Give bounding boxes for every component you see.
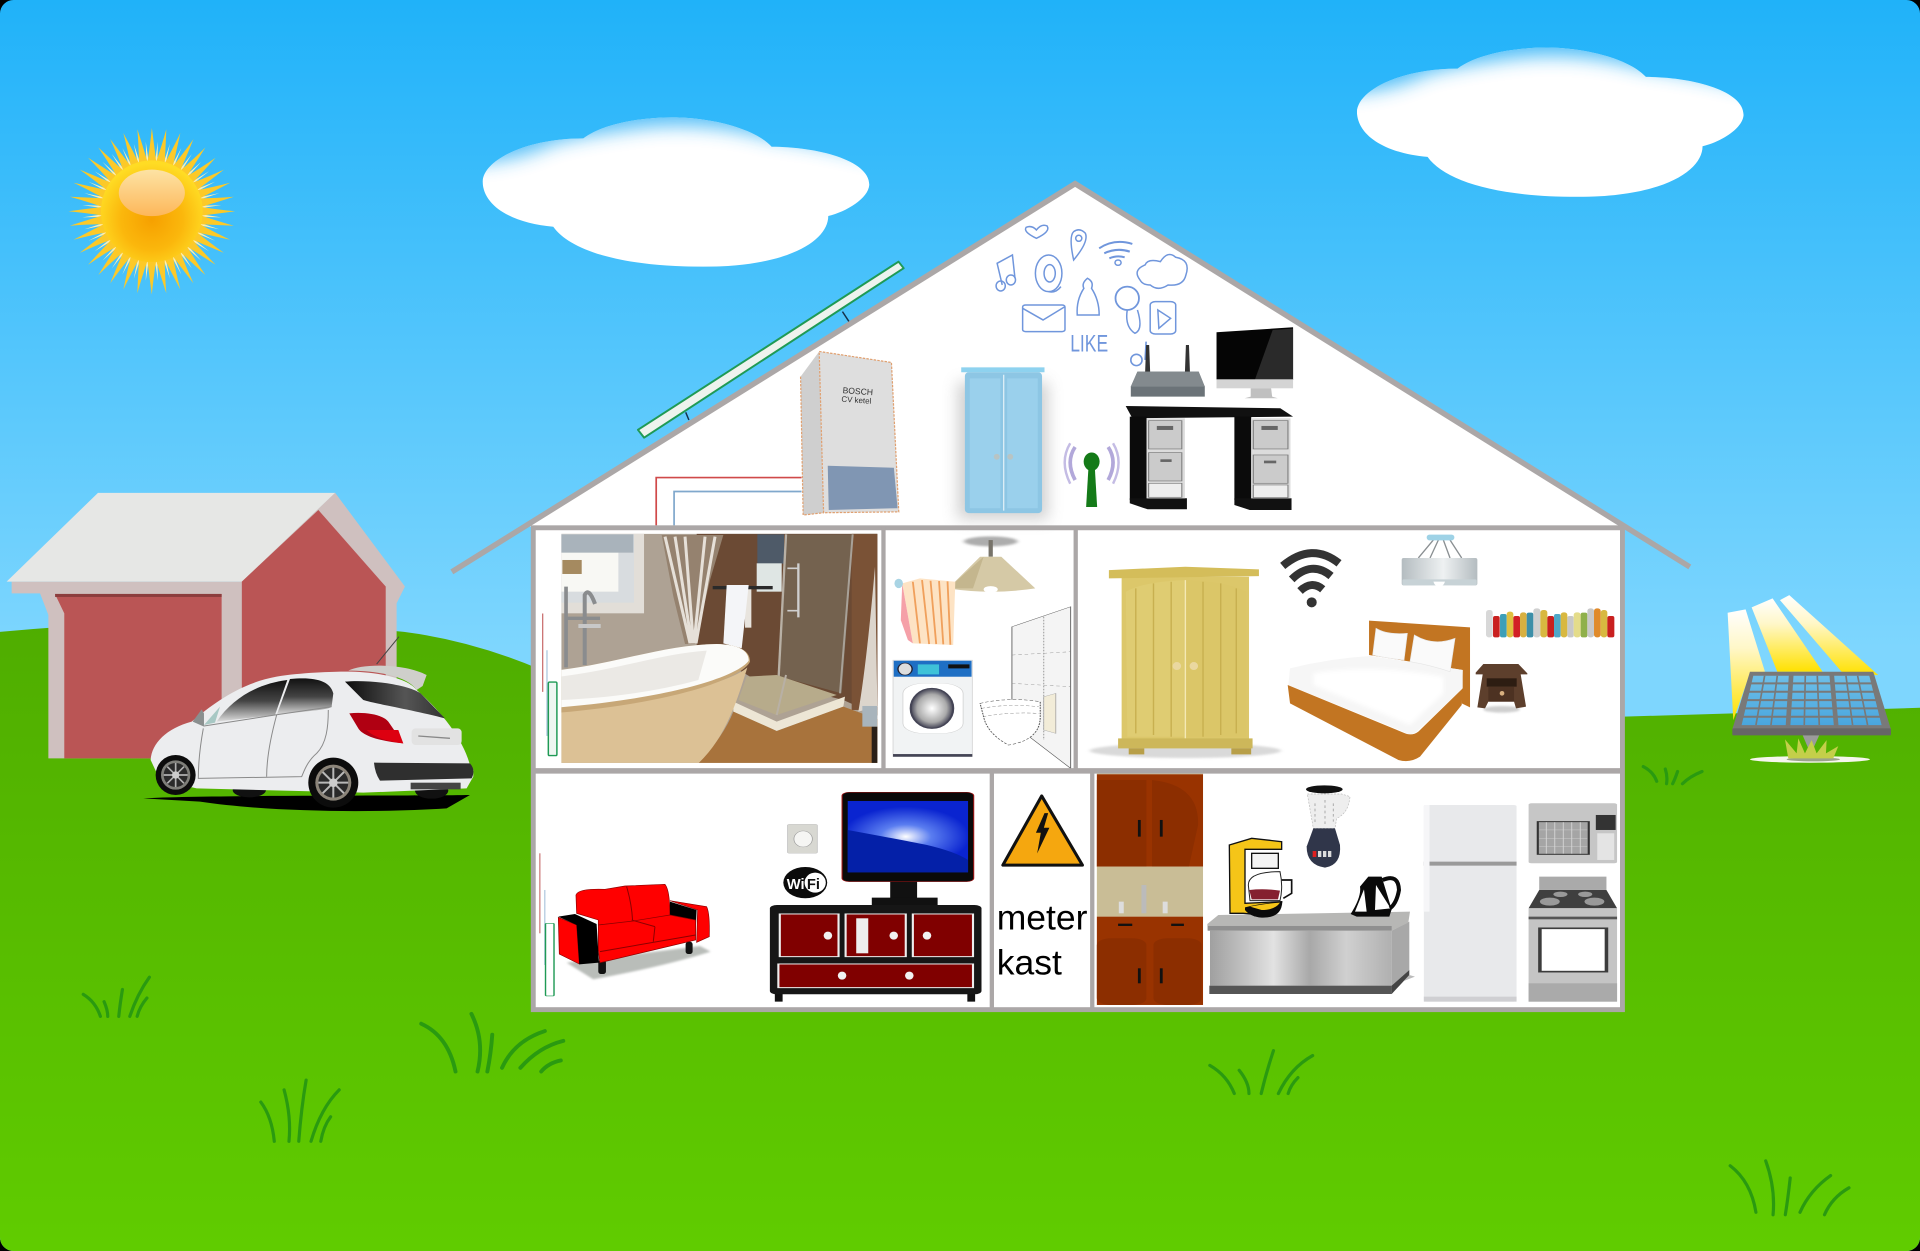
warning sign [1003,796,1082,865]
kettle [1351,877,1399,917]
bathroom wood wall [697,533,880,717]
bookshelf [1486,608,1614,637]
bathroom window [560,533,644,613]
curtain right [858,567,877,712]
bathtub [560,644,750,763]
wifi logo text: Wi [787,877,805,893]
blender [1306,785,1350,868]
house [452,184,1690,1011]
refrigerator [1424,805,1517,1002]
stove [1529,877,1617,1002]
bathroom wall [560,533,880,767]
coffee maker [1229,838,1292,918]
wifi logo text [787,877,820,893]
barn roof [7,493,335,582]
wifi signal icon [1283,553,1339,607]
nightstand [1476,664,1527,713]
meter cupboard label: kast [997,943,1062,983]
toilet [980,693,1056,745]
attic fill [525,184,1625,527]
grass tuft 1 [83,977,149,1016]
solar collector on roof [638,262,904,438]
grass tuft 5 [1730,1161,1849,1215]
boiler [801,351,899,515]
cloud right [1357,48,1744,197]
monitor [1217,327,1293,398]
desk [1126,406,1293,510]
grass tuft 4 [1210,1051,1313,1094]
tiled wall [1012,607,1071,768]
car [143,637,473,811]
ground hills [0,622,1920,1251]
pendant lamp [1402,535,1477,587]
barn side trim [241,493,405,698]
grass tuft 2 [421,1014,563,1071]
bed [1288,621,1470,761]
pipes and radiator bathroom [543,613,557,756]
doodle icons [996,225,1187,366]
doodle word: LIKE [1070,330,1108,357]
shower base [733,675,845,731]
wood panel right [852,533,878,710]
television [842,792,974,907]
sun beams [1728,595,1878,720]
barn door [55,594,222,758]
sun [69,128,235,295]
rooms fill [531,527,1624,1011]
router [1131,345,1205,397]
panel: bedroom wardrobe [1090,567,1281,758]
grass tuft 3 [261,1080,339,1141]
wifi logo background [783,867,827,898]
barn [7,493,405,758]
wifi antenna [1065,443,1119,507]
boiler: CV ketel [841,395,872,406]
microwave [1529,803,1617,863]
kitchen cupboards [1097,772,1203,1005]
cloud left [482,117,870,267]
meter cupboard label [997,897,1088,983]
meter cupboard label: meter [997,897,1088,937]
blue cabinet [958,367,1048,519]
ceiling lamp [948,536,1035,593]
wifi logo text: Fi [807,877,820,893]
wall socket [788,824,817,853]
towel [894,578,955,645]
panel: laundry [893,536,1071,768]
shower glass [757,534,853,715]
panel: kitchen appliances right [1097,772,1617,1005]
panel: bathroom photo [560,533,880,767]
towel [713,585,773,648]
barn side wall [242,510,386,704]
boiler label: BOSCH [842,385,873,397]
grass tufts [83,767,1849,1215]
panel: bedroom furniture [1283,535,1614,761]
sofa [558,884,711,979]
panel: living room [540,792,981,1002]
barn front trim [12,582,242,758]
panel: kitchen counter and small appliances [1207,785,1415,994]
solar panel [1728,595,1891,763]
faucet [566,587,601,667]
tv cabinet [770,905,981,1002]
pipes and radiator [540,853,554,996]
washing machine [893,660,972,757]
panel: meter cupboard [997,796,1088,983]
house outline and walls [452,184,1690,1010]
grass tuft 6 [1643,767,1702,784]
kitchen counter [1207,912,1415,994]
wood floor [698,707,880,763]
heating pipes [656,478,802,525]
curtain [662,535,723,644]
